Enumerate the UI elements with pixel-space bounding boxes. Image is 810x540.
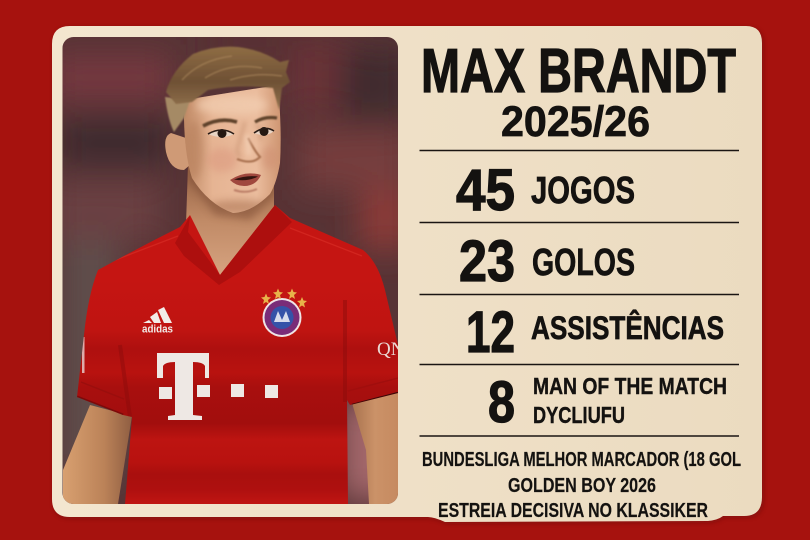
jersey collar: [175, 205, 292, 285]
face shading: [185, 95, 278, 214]
mouth: [230, 173, 261, 186]
hair: [166, 47, 290, 110]
nose: [237, 138, 260, 162]
season: 2025/26: [501, 98, 650, 146]
honours list: [422, 448, 741, 522]
stat: assists: [466, 300, 724, 365]
stat: goals: GOLOS: [532, 242, 635, 284]
hair highlights: [182, 56, 282, 80]
honours list: ESTREIA DECISIVA NO KLASSIKER: [438, 499, 708, 522]
T logo: [157, 353, 278, 420]
right arm: [352, 392, 398, 504]
adidas logo: adidas: [142, 324, 173, 336]
ear: [165, 133, 190, 170]
stat: games: 45: [456, 158, 515, 223]
stat: man of the match: DYCLIUFU: [533, 402, 625, 428]
sleeve sponsor: QN: [377, 339, 405, 360]
stat: goals: [459, 229, 635, 294]
right eye: [254, 127, 274, 136]
left eyebrow: [203, 120, 237, 126]
stat: man of the match: [488, 370, 727, 435]
face: [184, 85, 281, 213]
stat: games: [456, 158, 635, 223]
stat: assists: ASSISTÊNCIAS: [531, 310, 724, 346]
honours list: GOLDEN BOY 2026: [508, 474, 656, 497]
stat: goals: 23: [459, 229, 515, 294]
stat: assists: 12: [466, 300, 515, 365]
stat: games: JOGOS: [531, 170, 635, 212]
neck: [186, 166, 274, 275]
hair fade: [165, 97, 190, 132]
stat: man of the match: MAN OF THE MATCH: [533, 373, 727, 399]
club badge with stars: [261, 288, 307, 337]
divider lines: [420, 150, 739, 436]
left arm: [63, 405, 132, 504]
left eye: [208, 129, 234, 138]
adidas logo: [142, 307, 173, 332]
red jersey: [77, 205, 398, 504]
right eyebrow: [255, 118, 277, 122]
stat: man of the match: 8: [488, 370, 515, 435]
panel: player photo: [50, 30, 410, 504]
photo background: blurred stadium: [50, 30, 410, 504]
head: [165, 47, 290, 214]
